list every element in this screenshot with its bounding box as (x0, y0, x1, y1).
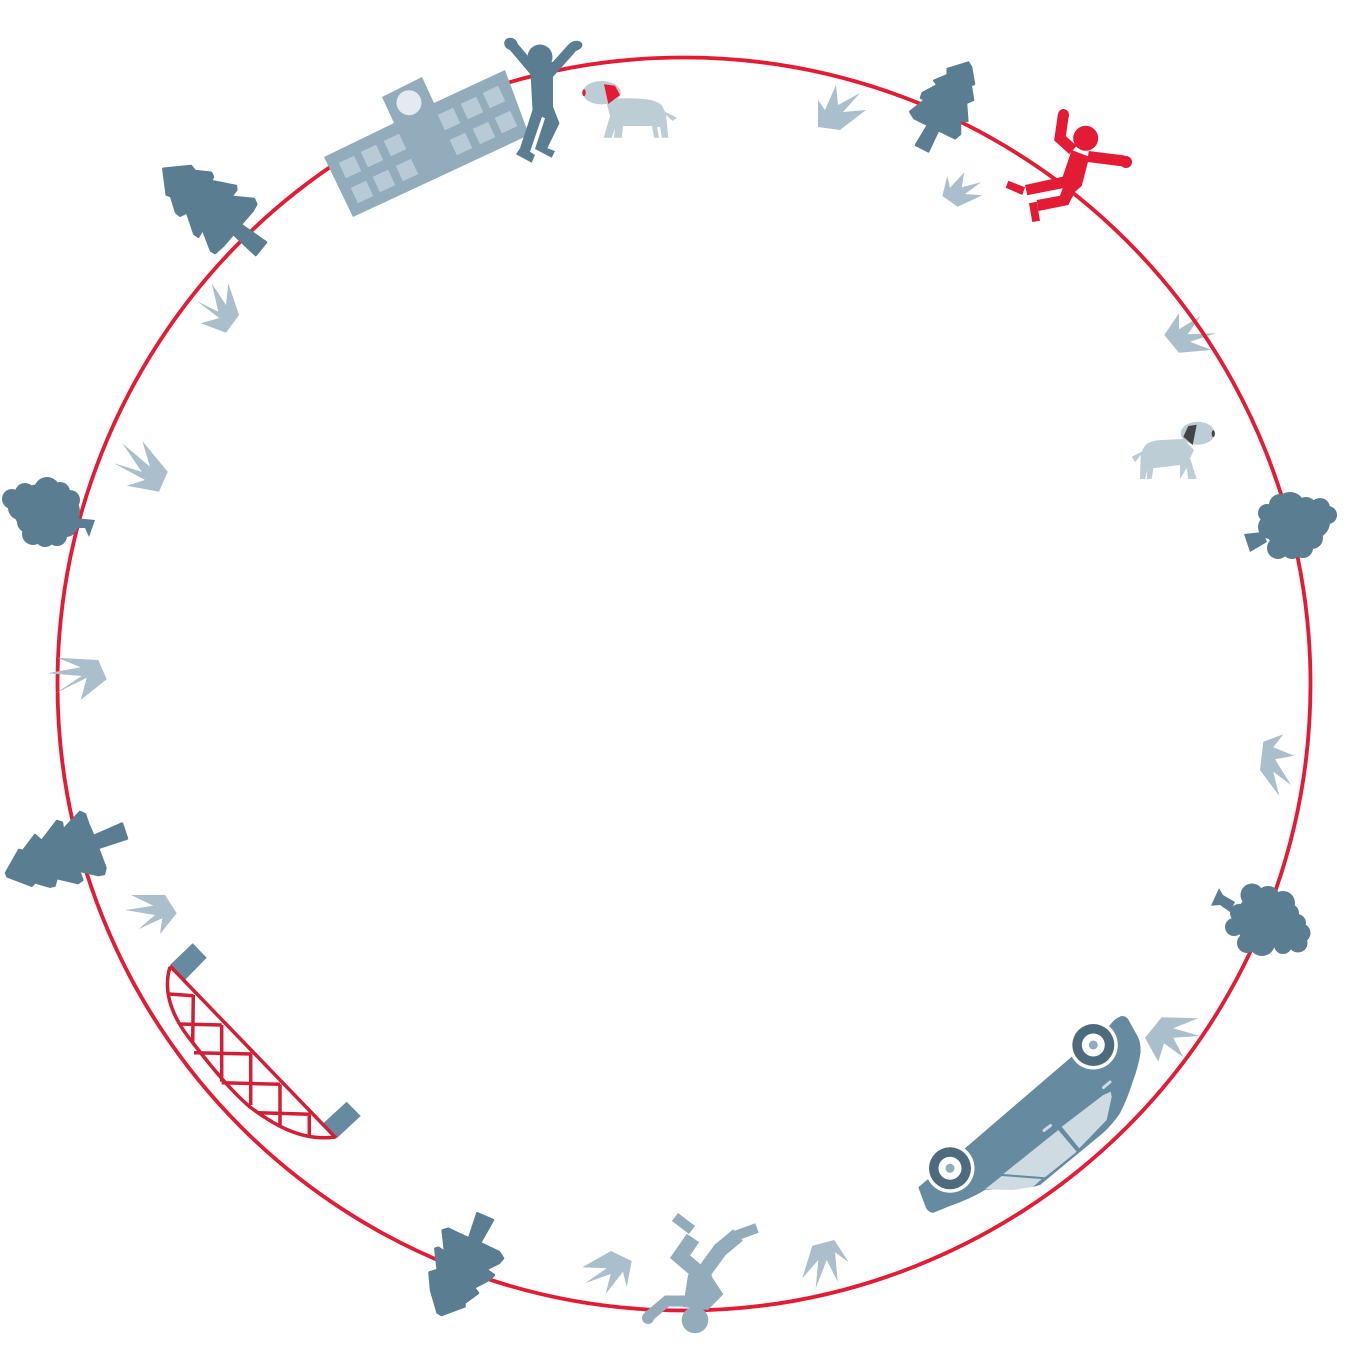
bush: lower right (1211, 884, 1310, 956)
grass tuft: lower left (125, 895, 177, 934)
grass tuft: bottom right (802, 1240, 849, 1288)
grass tuft: upper left (197, 283, 239, 333)
pine tree: top right (910, 63, 974, 151)
bush: left (2, 477, 95, 547)
grass tuft: right (1260, 734, 1294, 796)
school building (324, 70, 529, 217)
grass tuft: top right (942, 172, 982, 207)
fallen person: bottom (642, 1217, 757, 1333)
grass tuft: top (818, 85, 866, 130)
grass tuft: left (47, 658, 107, 700)
falling person in red (1006, 109, 1132, 222)
grass tuft: bottom (582, 1251, 632, 1294)
grass tuft: mid left (114, 441, 168, 492)
overturned car (918, 1016, 1141, 1213)
red net bridge (167, 943, 361, 1138)
bush: right (1244, 492, 1337, 559)
dog with red ear, top (582, 81, 677, 138)
pine tree: bottom (430, 1213, 503, 1315)
jumping person (502, 35, 584, 163)
pine tree: upper left (163, 166, 266, 255)
dog with dark ear, right (1132, 422, 1215, 479)
grass tuft: upper right, behind ring (1164, 313, 1216, 353)
grass tuft: near car (1145, 1017, 1200, 1062)
pine tree: left (6, 812, 127, 887)
